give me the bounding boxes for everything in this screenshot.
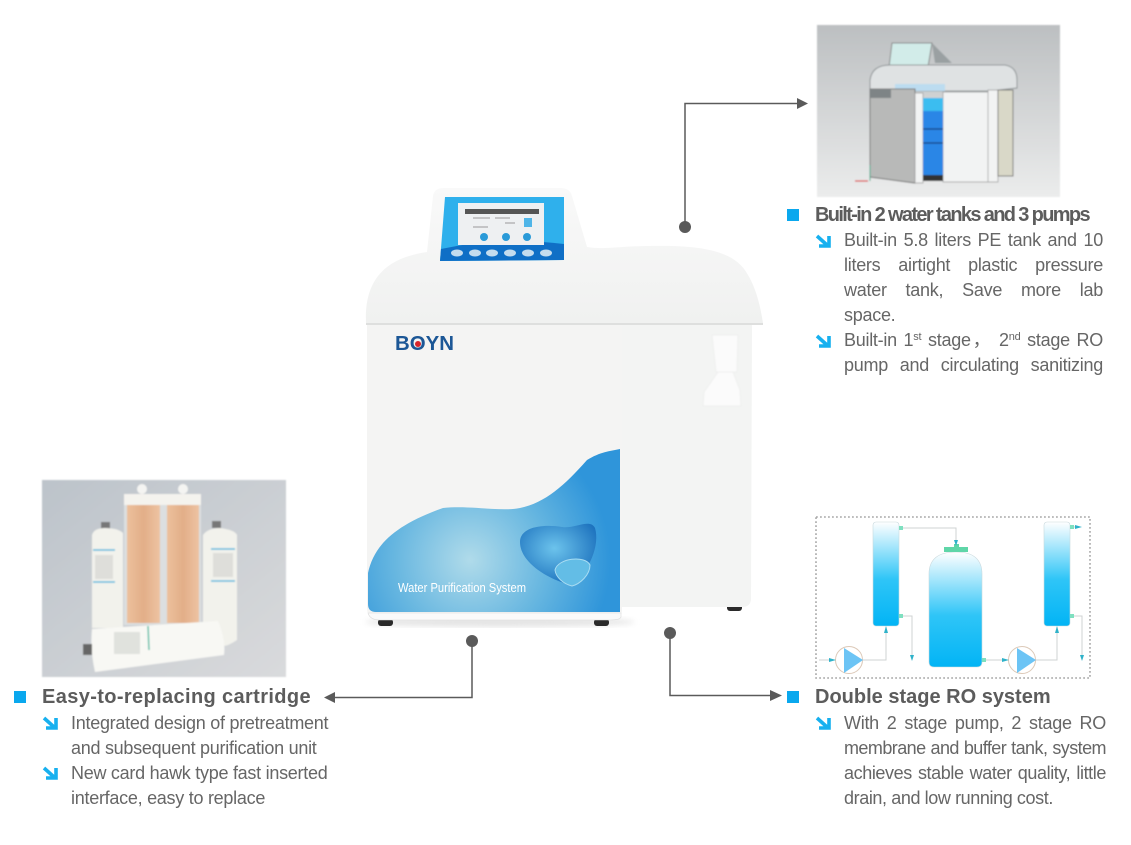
text block: double stage RO xyxy=(815,686,1106,808)
right window xyxy=(998,90,1013,176)
top-right photo: internal view xyxy=(817,25,1060,197)
dispenser xyxy=(703,335,741,406)
bullet one text: liters airtight plastic pressure xyxy=(844,255,1103,275)
front body xyxy=(367,325,622,620)
top hood xyxy=(366,188,763,323)
front cartridge xyxy=(83,621,224,672)
heading: cartridge: Easy-to-replacing cartridge xyxy=(42,686,311,708)
orange membranes xyxy=(124,494,201,507)
touch screen xyxy=(458,203,544,245)
water drop xyxy=(520,524,596,586)
text block: cartridge xyxy=(42,686,328,808)
blue wave panel xyxy=(368,449,620,612)
pipes xyxy=(819,527,1082,660)
bullet two text: New card hawk type fast inserted xyxy=(71,763,327,783)
bullet two text: interface, easy to replace xyxy=(71,788,265,808)
bullet two text xyxy=(71,763,327,808)
bullet: cartridge heading xyxy=(14,691,26,703)
RO system diagram xyxy=(816,517,1090,678)
bullet one text xyxy=(71,713,328,758)
left side panel xyxy=(870,89,915,183)
arrow bullets xyxy=(44,236,829,778)
product name: Water Purification System xyxy=(398,581,526,595)
axis indicator xyxy=(869,165,871,181)
arrow: machine to tanks photo xyxy=(679,98,808,233)
bullet text xyxy=(844,713,1106,808)
machine shadow xyxy=(365,617,635,627)
bullet text: With 2 stage pump, 2 stage RO xyxy=(844,713,1106,733)
bullet: RO heading xyxy=(787,691,799,703)
bullet two text xyxy=(844,330,1103,375)
ports xyxy=(899,525,1074,662)
bullet one text: Integrated design of pretreatment xyxy=(71,713,328,733)
heading: double stage RO: Double stage RO system xyxy=(815,686,1051,708)
dotted border xyxy=(816,517,1090,678)
bullet one text: and subsequent purification unit xyxy=(71,738,317,758)
second RO column xyxy=(1044,522,1070,626)
bullet one text: water tank, Save more lab xyxy=(844,280,1103,300)
first RO column xyxy=(873,522,899,626)
bullet two text: Built-in 1st stage， 2nd stage RO xyxy=(844,330,1103,350)
screen xyxy=(889,43,932,67)
arrow: machine to RO system xyxy=(664,627,782,701)
bullet two text: pump and circulating sanitizing xyxy=(844,355,1103,375)
heading: tanks and pumps: Built-in 2 water tanks and 3 pumps xyxy=(815,204,1089,226)
mounting tabs xyxy=(137,484,188,494)
arrow: machine to cartridge xyxy=(324,635,478,703)
right tower xyxy=(620,325,752,607)
pumps xyxy=(836,646,1036,674)
buffer tank xyxy=(929,552,982,667)
right cartridge xyxy=(203,521,237,646)
machine feet xyxy=(378,604,742,626)
bullet one text: space. xyxy=(844,305,895,325)
bullet: tanks heading xyxy=(787,209,799,221)
tank cap xyxy=(944,544,968,552)
flow markers xyxy=(829,525,1084,662)
control panel xyxy=(440,197,564,261)
bottom-left photo: cartridges xyxy=(42,480,286,677)
water purification machine xyxy=(365,188,763,627)
bullet text: drain, and low running cost. xyxy=(844,788,1053,808)
left cartridge xyxy=(92,522,123,628)
brand logo: BOYN xyxy=(395,333,454,355)
text block: tanks and pumps xyxy=(815,204,1103,375)
bullet text: achieves stable water quality, little xyxy=(844,763,1106,783)
white strips and panels xyxy=(915,90,998,183)
bullet one text xyxy=(844,230,1103,325)
water tank xyxy=(923,98,943,178)
transparent hood xyxy=(870,65,1017,91)
bullet one text: Built-in 5.8 liters PE tank and 10 xyxy=(844,230,1103,250)
bullet text: membrane and buffer tank, system xyxy=(844,738,1106,758)
panel buttons xyxy=(451,250,552,256)
